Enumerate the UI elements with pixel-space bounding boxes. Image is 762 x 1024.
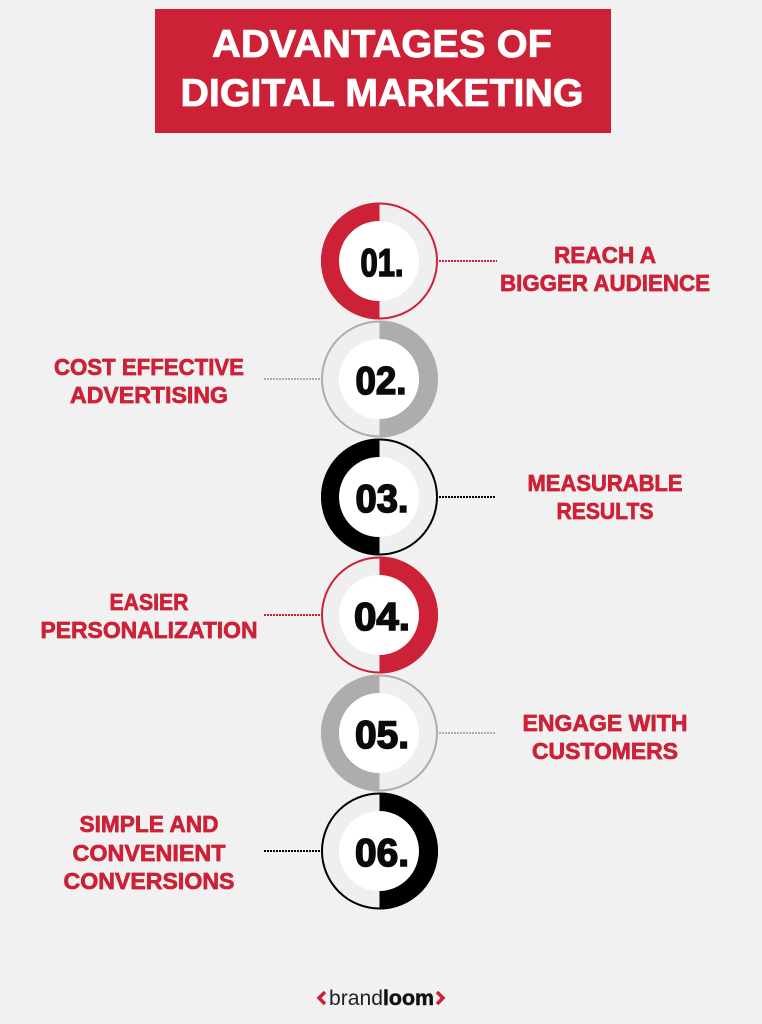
step 04: EASIER (110, 589, 189, 615)
step 01: 01. (360, 242, 404, 285)
step 02: ADVERTISING (70, 382, 228, 408)
step 04: 04. (354, 596, 410, 639)
title banner: DIGITAL MARKETING (180, 72, 584, 115)
step 03 (321, 438, 682, 556)
step 05: ENGAGE WITH (522, 710, 688, 736)
title banner (155, 9, 611, 133)
step 02: COST EFFECTIVE (54, 354, 244, 380)
brandloom logo: brand (329, 987, 383, 1010)
step 05: CUSTOMERS (532, 738, 678, 764)
step 06: SIMPLE AND (80, 811, 218, 837)
step 05: 05. (355, 714, 409, 757)
step 01: BIGGER AUDIENCE (500, 270, 710, 296)
step 03: 03. (356, 478, 408, 521)
step 03: MEASURABLE (528, 470, 682, 496)
step 01: REACH A (554, 242, 656, 268)
step 01 (321, 202, 710, 320)
step 02: 02. (356, 360, 406, 403)
brandloom logo (319, 987, 443, 1010)
step 06: CONVERSIONS (64, 868, 234, 894)
title banner: ADVANTAGES OF (212, 23, 552, 66)
step 05 (321, 674, 688, 792)
step 02 (54, 320, 438, 438)
step 06: CONVENIENT (72, 840, 226, 866)
step 06 (64, 792, 438, 910)
step 04: PERSONALIZATION (40, 617, 258, 643)
step 04 (40, 556, 438, 674)
step 03: RESULTS (556, 498, 654, 524)
step 06: 06. (355, 832, 409, 875)
brandloom logo: loom (383, 987, 434, 1010)
